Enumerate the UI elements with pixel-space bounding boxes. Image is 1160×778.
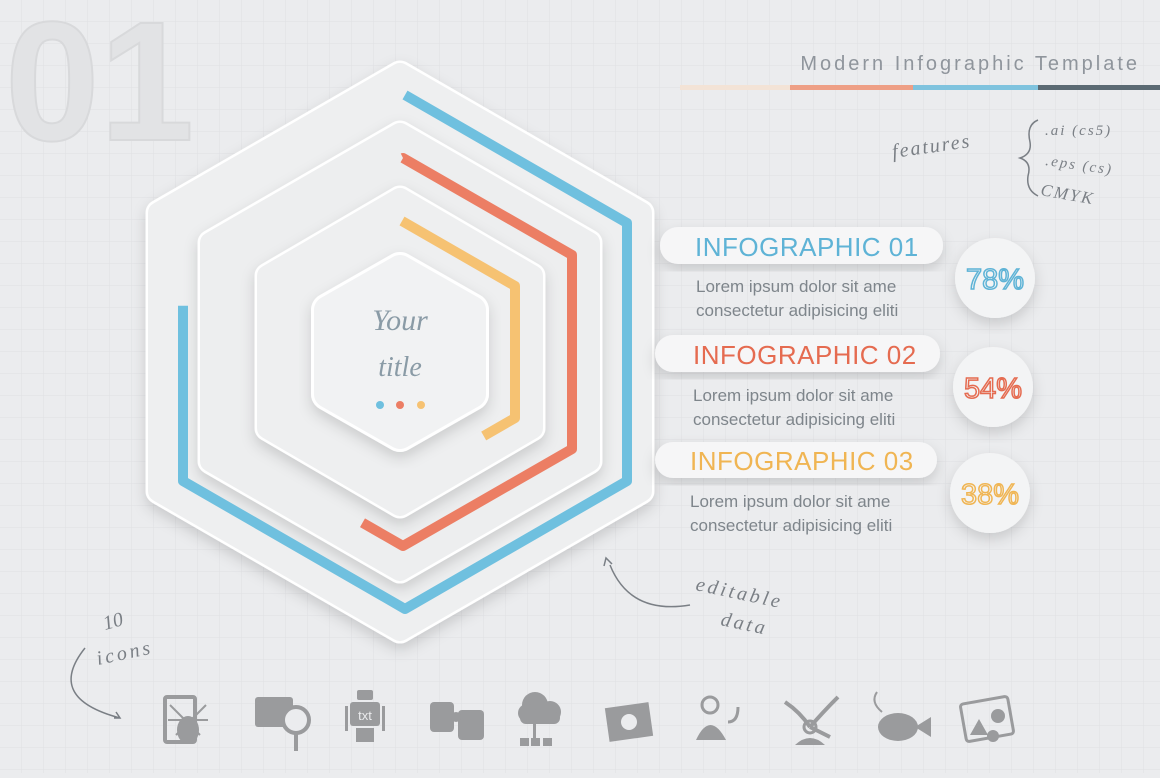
item 3: consectetur adipisicing eliti: [690, 516, 892, 535]
icon: robot txt: [345, 690, 385, 742]
hexagon diagram: [159, 74, 641, 630]
title: Modern Infographic Template: [800, 53, 1140, 75]
icon: robot txt: txt: [358, 708, 372, 723]
item 2: INFOGRAPHIC 02: [693, 340, 917, 370]
icon: person plug: [696, 697, 738, 740]
note: features: .eps (cs): [1044, 153, 1114, 178]
icon: film: [605, 702, 653, 742]
note: features: CMYK: [1039, 180, 1096, 208]
yellow arc 38%: [289, 221, 515, 483]
note: editable data: [604, 558, 785, 640]
note: 10 icons: [71, 608, 155, 718]
item 3: INFOGRAPHIC 03: [690, 446, 914, 476]
icon: fish: [874, 692, 931, 741]
icon: spider: [165, 697, 208, 744]
item 2: 54%: [964, 373, 1022, 405]
icon row: [165, 690, 1014, 751]
item 1: Lorem ipsum dolor sit ame: [696, 277, 896, 296]
item 1: 78%: [966, 264, 1024, 296]
item 3: Lorem ipsum dolor sit ame: [690, 492, 890, 511]
icon: monitor search: [255, 697, 309, 751]
icon: puzzle: [430, 702, 484, 740]
item 2: consectetur adipisicing eliti: [693, 410, 895, 429]
note: features: features: [891, 130, 973, 163]
icon: cloud network: [518, 692, 561, 746]
note: 10 icons: 10: [101, 608, 126, 635]
item 3: 38%: [961, 479, 1019, 511]
hexagon diagram: title: [378, 352, 422, 383]
item 1: [660, 227, 1035, 320]
title underline: [680, 85, 1160, 90]
note: editable data: editable: [694, 573, 785, 613]
icon: warning window: [960, 696, 1014, 742]
note: 10 icons: icons: [94, 636, 155, 670]
note: features: .ai (cs5): [1045, 123, 1112, 139]
blue arc 78%: [183, 95, 627, 609]
note: editable data: data: [719, 608, 770, 640]
item 2: Lorem ipsum dolor sit ame: [693, 386, 893, 405]
item 3: [655, 442, 1030, 535]
icon: split arrows: [785, 697, 838, 745]
item 2: [655, 335, 1033, 429]
red arc 54%: [234, 158, 572, 546]
item 1: consectetur adipisicing eliti: [696, 301, 898, 320]
note: features: [891, 120, 1114, 208]
item 1: INFOGRAPHIC 01: [695, 232, 919, 262]
center title: Your: [372, 304, 428, 337]
